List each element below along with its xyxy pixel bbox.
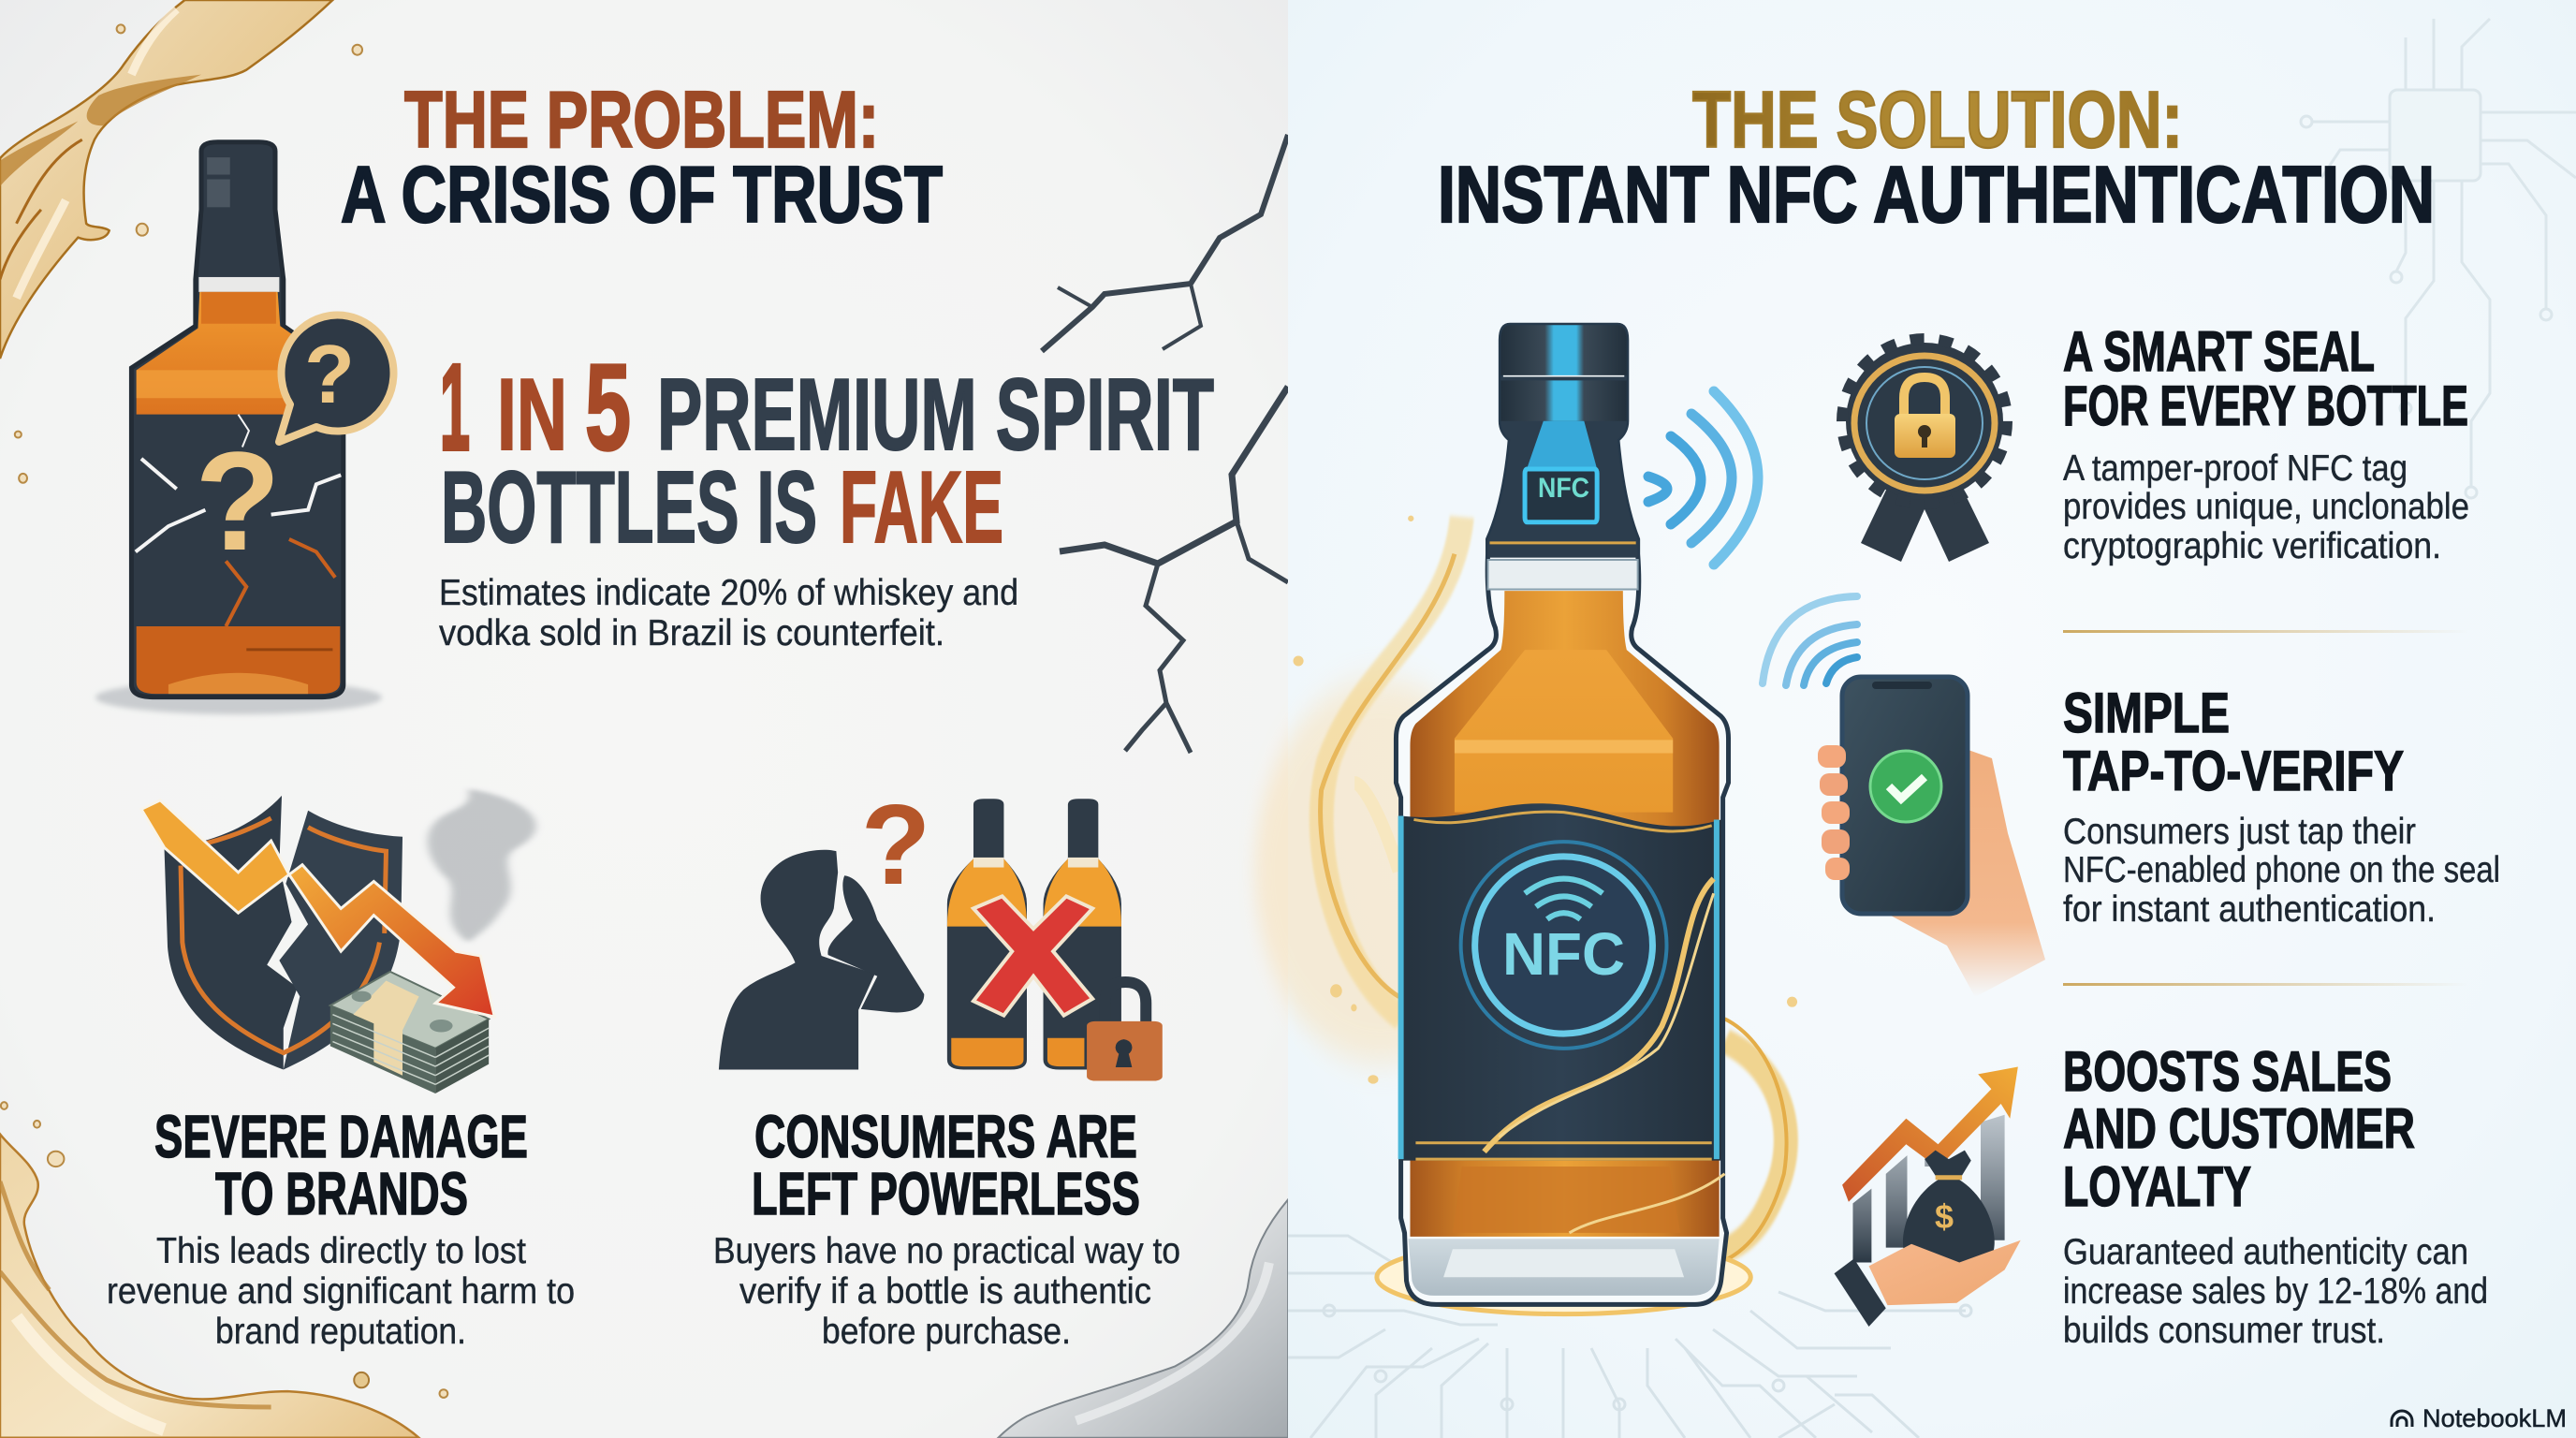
NotebookLM watermark: NotebookLM: [2422, 1404, 2567, 1432]
feature: boosts sales and customer loyalty: builds consumer trust.: [2063, 1311, 2385, 1351]
circuit lines under bottle: [1288, 1236, 1971, 1438]
title: the problem: A CRISIS OF TRUST: [341, 151, 943, 240]
text: dollar sign on bag: $: [1935, 1197, 1954, 1236]
falling arrow: [141, 800, 289, 913]
printed label: [1401, 803, 1721, 1161]
headline stat: IN: [497, 358, 567, 472]
feature: simple tap-to-verify: for instant authentication.: [2063, 889, 2436, 930]
cupped hand: [1869, 1240, 2021, 1305]
whiskey splash top left: [0, 0, 362, 483]
grey splash bottom right: [998, 1199, 1288, 1438]
card: consumers are left powerless: verify if a bottle is authentic: [739, 1271, 1151, 1312]
headline stat: BOTTLES IS: [441, 450, 817, 565]
text: NFC on label: NFC: [1502, 920, 1625, 988]
stat description: Estimates indicate 20% of whiskey and: [439, 573, 1018, 613]
icon: smart seal badge: [1842, 339, 2007, 562]
card: severe damage to brands: revenue and significant harm to: [107, 1271, 575, 1312]
feature: simple tap-to-verify: [2063, 682, 2500, 930]
headline stat: PREMIUM SPIRIT: [657, 358, 1214, 472]
feature: simple tap-to-verify: TAP-TO-VERIFY: [2063, 740, 2404, 802]
text: NFC on neck tag: NFC: [1538, 473, 1589, 504]
title: the solution: [1438, 76, 2435, 240]
headline stat: [440, 338, 1214, 565]
headline stat: FAKE: [840, 450, 1003, 565]
card: severe damage to brands: This leads directly to lost: [156, 1231, 526, 1271]
card: severe damage to brands: brand reputation.: [215, 1312, 466, 1352]
whiskey splash bottom left: [0, 1102, 447, 1438]
card: consumers are left powerless: Buyers have no practical way to: [713, 1231, 1180, 1271]
neck: [1488, 376, 1638, 558]
neck NFC tag: [1525, 469, 1597, 522]
card: consumers are left powerless: before purchase.: [822, 1312, 1071, 1352]
icon: sales growth and money bag: [1835, 1067, 2021, 1327]
card: severe damage to brands: TO BRANDS: [215, 1160, 468, 1227]
card: consumers are left powerless: CONSUMERS ARE: [754, 1103, 1137, 1170]
feature: boosts sales and customer loyalty: Guaranteed authenticity can: [2063, 1232, 2468, 1272]
feature: boosts sales and customer loyalty: BOOSTS SALES: [2063, 1040, 2392, 1103]
icon: confused consumer, crossed bottles and padlock: [719, 781, 1163, 1081]
red x: [973, 896, 1092, 1016]
icon: cracked fake bottle with question marks: [95, 142, 394, 714]
glass base: [1409, 1239, 1720, 1296]
title: the problem: [341, 76, 943, 240]
cracks in background: [1042, 135, 1288, 753]
headline stat: 1: [440, 338, 470, 476]
title: the problem: THE PROBLEM:: [404, 76, 879, 165]
question mark: ?: [861, 781, 930, 908]
illustration: NFC whisky bottle: [1254, 325, 1797, 1314]
feature: simple tap-to-verify: SIMPLE: [2063, 682, 2230, 744]
big question mark on bottle: ?: [195, 422, 281, 580]
feature: simple tap-to-verify: NFC-enabled phone on the seal: [2063, 850, 2500, 890]
feature: boosts sales and customer loyalty: LOYALTY: [2063, 1155, 2251, 1218]
divider: [2063, 983, 2468, 986]
stat description: vodka sold in Brazil is counterfeit.: [439, 613, 944, 653]
card: consumers are left powerless: LEFT POWERLESS: [752, 1160, 1140, 1227]
money stack: [330, 972, 489, 1093]
two bottles: [947, 799, 1163, 1081]
warm glow and gold swirls: [1254, 516, 1797, 1314]
feature: a smart seal for every bottle: cryptographic verification.: [2063, 526, 2441, 566]
feature: a smart seal for every bottle: provides unique, unclonable: [2063, 487, 2469, 527]
money bag: [1903, 1151, 1995, 1262]
shield halves: [165, 796, 298, 1069]
speech bubble with question mark: [279, 315, 394, 442]
feature: boosts sales and customer loyalty: AND CUSTOMER: [2063, 1097, 2415, 1160]
bottle glass outline: [1396, 325, 1729, 1304]
title: the solution: THE SOLUTION:: [1692, 76, 2183, 165]
whisky liquid: [1410, 591, 1720, 1237]
person silhouette: [719, 850, 924, 1069]
speech bubble with question mark: ?: [304, 328, 355, 420]
feature: boosts sales and customer loyalty: increase sales by 12-18% and: [2063, 1271, 2488, 1312]
stat description: [439, 573, 1018, 653]
NFC emblem ring: [1461, 842, 1666, 1049]
feature: boosts sales and customer loyalty: [2063, 1040, 2488, 1351]
feature: simple tap-to-verify: Consumers just tap their: [2063, 812, 2416, 852]
headline stat: 5: [585, 338, 631, 476]
gold swirl across label: [1485, 879, 1714, 1152]
icon: hand tapping phone: [1763, 596, 2045, 997]
feature: a smart seal for every bottle: A tamper-proof NFC tag: [2063, 448, 2408, 489]
feature: a smart seal for every bottle: [2063, 320, 2469, 566]
divider: [2063, 630, 2468, 633]
padlock: [1105, 982, 1146, 1023]
smoke: [428, 789, 535, 943]
card: severe damage to brands: [107, 1103, 575, 1352]
icon: NFC waves from bottle: [1648, 391, 1758, 565]
panel: the problem: [0, 0, 1288, 1438]
card: severe damage to brands: SEVERE DAMAGE: [154, 1103, 528, 1170]
card: consumers are left powerless: [713, 1103, 1180, 1352]
panel: the solution: [1254, 0, 2576, 1438]
icon: cracked shield, falling arrow and money: [141, 789, 535, 1093]
feature: a smart seal for every bottle: A SMART SEAL: [2063, 320, 2375, 383]
circuit chip background top right: [2301, 19, 2576, 498]
